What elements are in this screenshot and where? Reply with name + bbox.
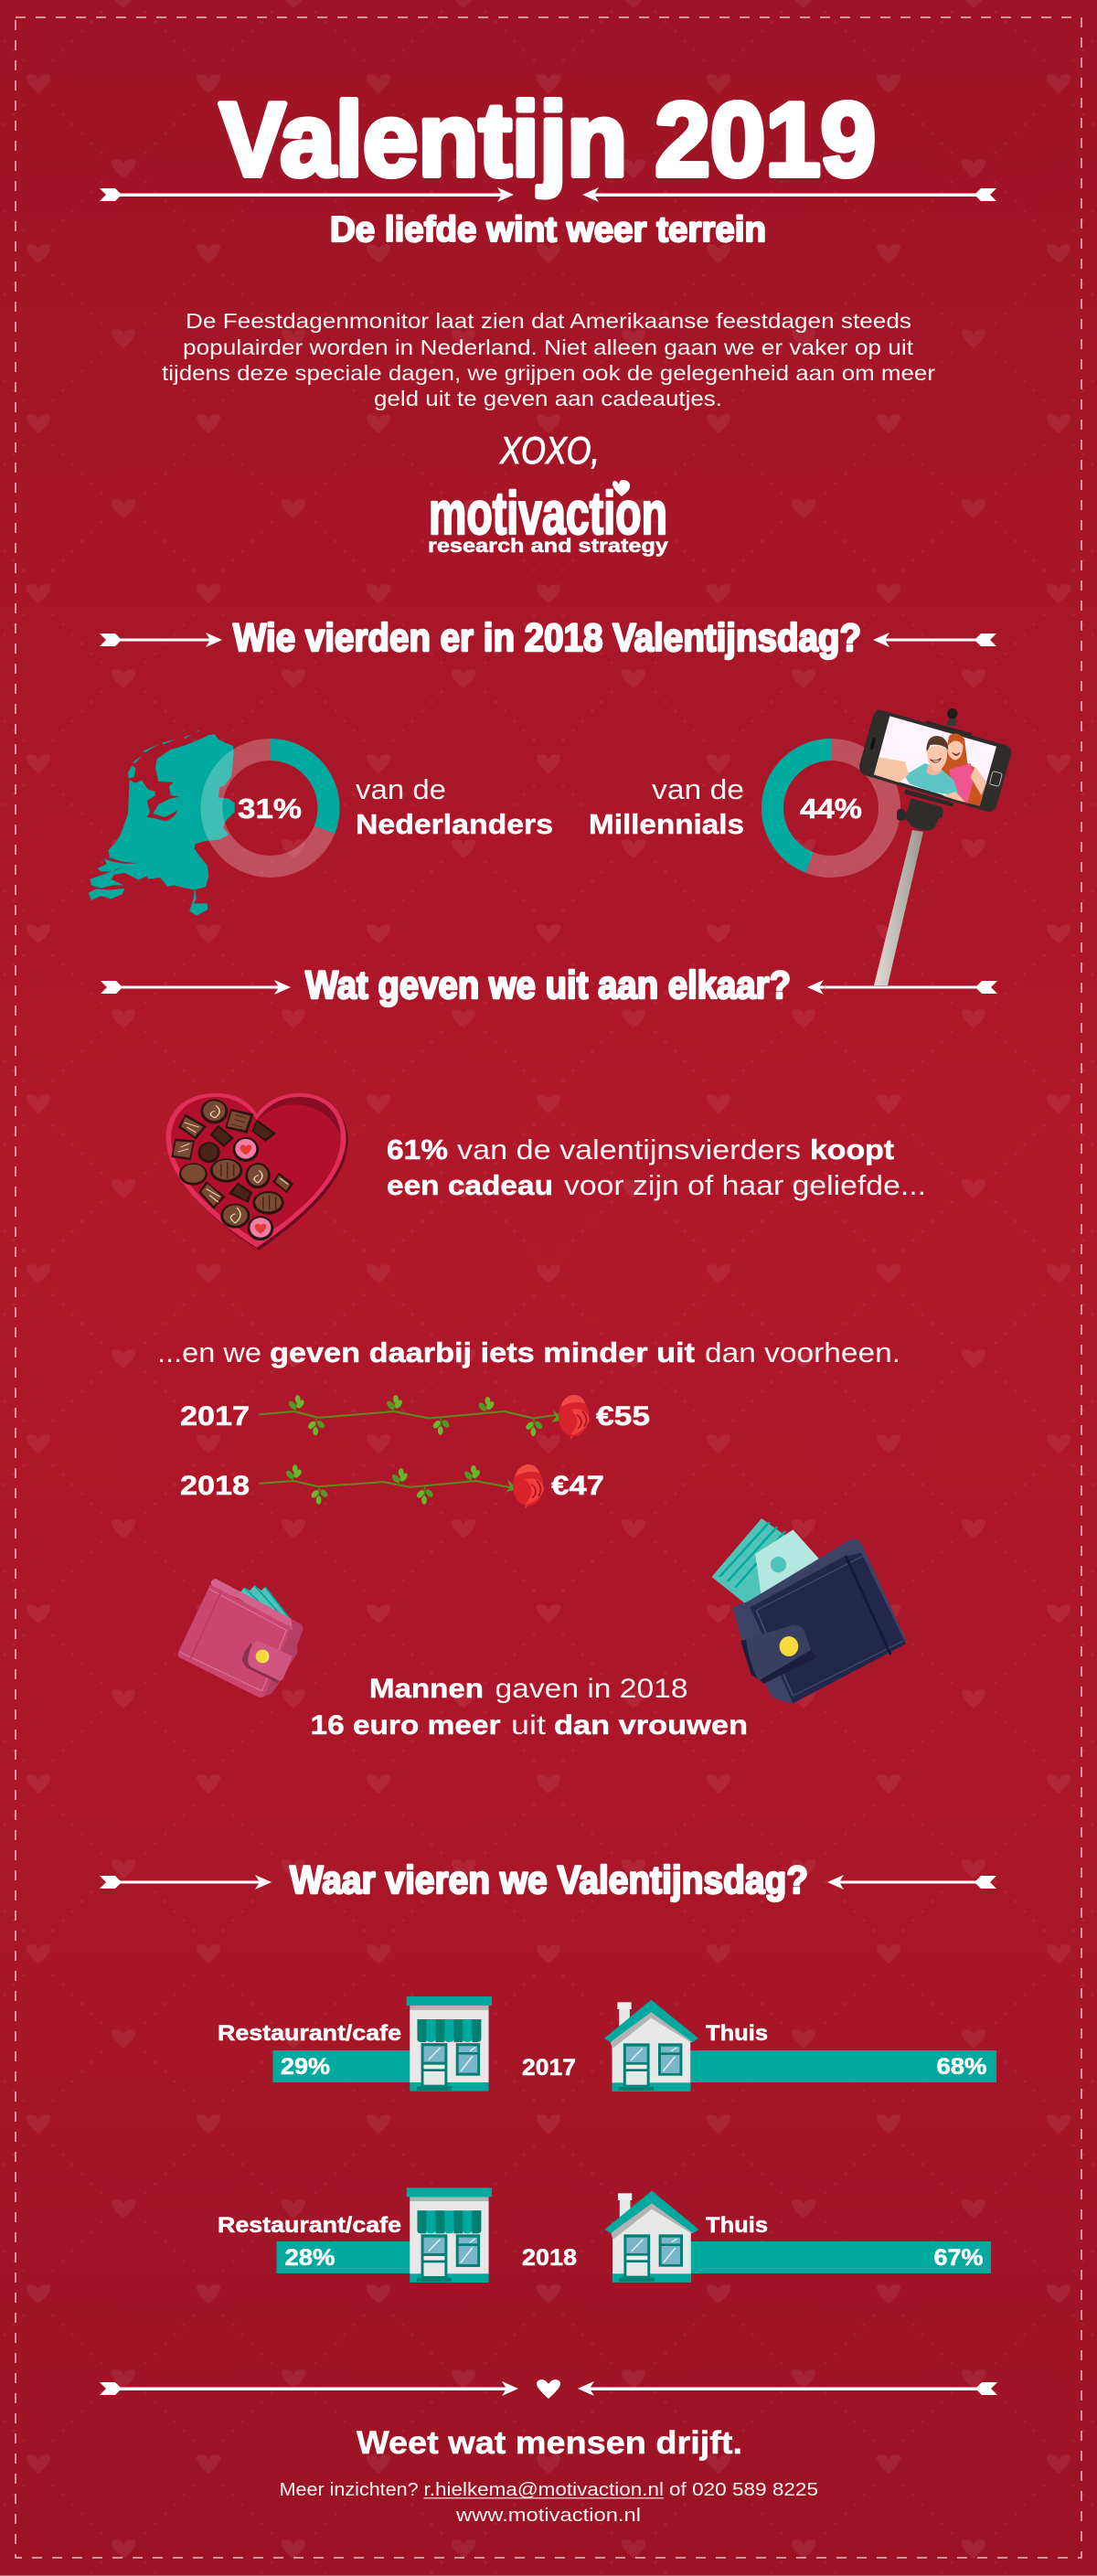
bar chart row: 2017 bbox=[218, 1996, 996, 2092]
text: 61% koopt een cadeau: een cadeau bbox=[387, 1169, 553, 1201]
text: Mannen gaven meer uit: dan vrouwen bbox=[554, 1710, 748, 1740]
rose chart: 2018 bbox=[180, 1464, 604, 1509]
contact details: r.hielkema@motivaction.nl bbox=[424, 2480, 664, 2500]
bar chart row: 2017: 2017 bbox=[522, 2055, 576, 2081]
text: geven daarbij iets minder uit bbox=[157, 1336, 900, 1368]
text: Mannen gaven meer uit: gaven in 2018 bbox=[495, 1674, 687, 1704]
icon: pink wallet bbox=[177, 1579, 304, 1698]
label: van de Millennials bbox=[589, 773, 744, 840]
contact details bbox=[280, 2480, 818, 2526]
icon: restaurant 2017 bbox=[407, 1996, 492, 2092]
arrow: title left bbox=[100, 187, 514, 202]
text: 61% koopt een cadeau: koopt bbox=[810, 1134, 894, 1166]
logo: motivaction: motivaction bbox=[429, 479, 667, 547]
bar chart row: 2017: 29% bbox=[281, 2054, 330, 2080]
text: geven daarbij iets minder uit: dan voorheen. bbox=[705, 1336, 900, 1368]
text: geven daarbij iets minder uit: ...en we bbox=[157, 1336, 261, 1368]
bar chart row: 2018: Thuis bbox=[706, 2213, 768, 2238]
rose chart: 2018: 2018 bbox=[180, 1471, 250, 1501]
intro paragraph: populairder worden in Nederland. Niet alleen gaan we er vaker op uit bbox=[183, 335, 914, 359]
bar chart row: 2018: 2018 bbox=[522, 2245, 577, 2271]
bar chart row: 2017: Thuis bbox=[706, 2021, 768, 2046]
bar chart row: 2018: 67% bbox=[934, 2245, 984, 2271]
intro paragraph bbox=[162, 309, 935, 410]
intro paragraph: tijdens deze speciale dagen, we grijpen ook de gelegenheid aan om meer bbox=[162, 361, 935, 385]
bar chart row: 2018: Restaurant/cafe bbox=[218, 2213, 401, 2238]
contact details: of 020 589 8225 bbox=[669, 2480, 818, 2500]
intro paragraph: De Feestdagenmonitor laat zien dat Amerikaanse feestdagen steeds bbox=[186, 309, 911, 333]
icon: navy wallet with money bbox=[712, 1518, 906, 1703]
subtitle: De liefde wint weer terrein bbox=[330, 210, 766, 250]
donut chart: 31%: 31% bbox=[238, 793, 302, 825]
text: Mannen gaven meer uit: 16 euro meer bbox=[311, 1710, 501, 1740]
logo: motivaction bbox=[428, 479, 668, 557]
bar chart row: 2017: Restaurant/cafe bbox=[218, 2021, 401, 2046]
bar chart row: 2018 bbox=[218, 2187, 991, 2283]
heading: Waar vieren we: Waar vieren we Valentijnsdag? bbox=[290, 1858, 808, 1902]
intro paragraph: geld uit te geven aan cadeautjes. bbox=[374, 387, 722, 410]
footer arrows with heart bbox=[100, 2379, 997, 2399]
donut chart: 44% bbox=[772, 750, 889, 867]
text: 61% koopt een cadeau: voor zijn of haar geliefde... bbox=[564, 1169, 926, 1201]
text: Mannen gaven meer uit: Mannen bbox=[369, 1674, 484, 1704]
icon: selfie stick with phone bbox=[859, 708, 1011, 985]
rose chart: 2018: €47 bbox=[551, 1471, 604, 1501]
rose chart: 2017: 2017 bbox=[180, 1401, 250, 1432]
label: van de Nederlanders: Nederlanders bbox=[356, 808, 553, 840]
text: 61% koopt een cadeau: van de valentijnsvierders bbox=[457, 1134, 801, 1166]
heading: Wat geven we uit bbox=[101, 963, 997, 1007]
donut chart: 31% bbox=[212, 750, 329, 867]
xoxo signature: XOXO, bbox=[499, 429, 600, 472]
contact details: www.motivaction.nl bbox=[455, 2506, 641, 2526]
icon: house 2017 bbox=[604, 2000, 698, 2092]
text: 61% koopt een cadeau: 61% bbox=[387, 1134, 448, 1166]
arrow: title right bbox=[582, 187, 996, 202]
bar chart row: 2018: 28% bbox=[285, 2245, 335, 2271]
bar chart row: 2017: 68% bbox=[936, 2054, 987, 2080]
donut chart: 44%: 44% bbox=[800, 793, 862, 825]
label: van de Nederlanders bbox=[356, 773, 553, 840]
title: Valentijn 2019 bbox=[219, 82, 876, 198]
rose chart: 2017 bbox=[180, 1395, 650, 1440]
icon: heart-shaped chocolate box bbox=[166, 1093, 348, 1251]
heading: Wat geven we uit: Wat geven we uit aan elkaar? bbox=[305, 963, 791, 1007]
contact details: Meer inzichten? bbox=[280, 2480, 419, 2500]
icon: restaurant 2018 bbox=[407, 2187, 492, 2283]
text: Mannen gaven meer uit: uit bbox=[511, 1710, 547, 1740]
icon: house 2018 bbox=[604, 2191, 699, 2283]
icon: map of the Netherlands bbox=[89, 730, 235, 916]
text: Mannen gaven meer uit bbox=[311, 1674, 748, 1740]
heading: Waar vieren we bbox=[100, 1858, 996, 1902]
heading: Wie vierden: Wie vierden er in 2018 Valentijnsdag? bbox=[233, 616, 861, 660]
rose chart: 2017: €55 bbox=[596, 1401, 650, 1432]
label: van de Millennials: Millennials bbox=[589, 808, 744, 840]
text: geven daarbij iets minder uit: geven daarbij iets minder uit bbox=[270, 1336, 695, 1368]
logo: motivaction: research and strategy bbox=[428, 536, 668, 557]
label: van de Nederlanders: van de bbox=[356, 773, 446, 805]
text: 61% koopt een cadeau bbox=[387, 1134, 926, 1201]
label: van de Millennials: van de bbox=[652, 773, 744, 805]
footer slogan: Weet wat mensen drijft. bbox=[357, 2425, 742, 2461]
